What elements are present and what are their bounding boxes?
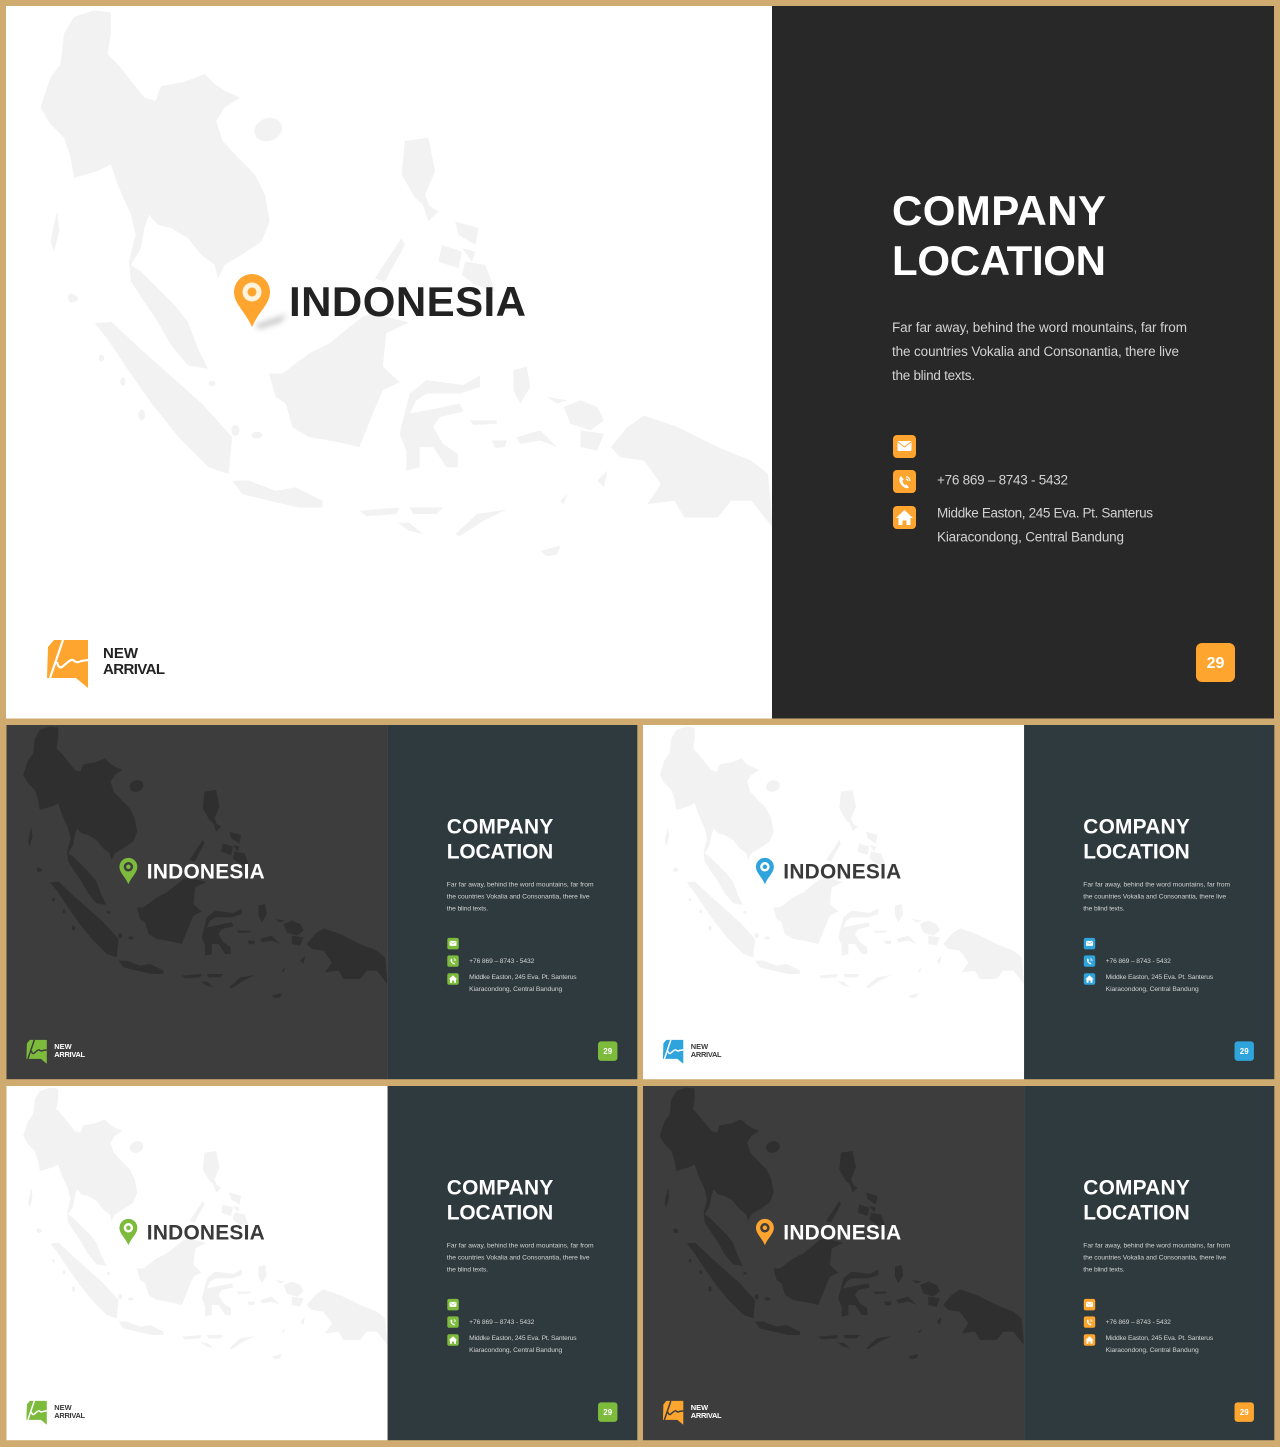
contact: phone number: +76 869 – 8743 - 5432	[937, 472, 1068, 488]
text block: description: the blind texts.	[1083, 906, 1125, 913]
page number badge: 29	[1240, 1047, 1249, 1056]
map: Southeast Asia	[660, 1088, 1024, 1359]
logo text	[691, 1403, 722, 1420]
logo text: ARRIVAL	[691, 1050, 722, 1059]
icon: email	[1084, 1299, 1095, 1310]
heading: company location	[1083, 815, 1190, 863]
slide: dark map with orange accent	[643, 1086, 1274, 1440]
panel: map side	[6, 6, 772, 718]
logo	[26, 1401, 47, 1425]
heading: company location: COMPANY	[892, 187, 1106, 234]
pin shadow	[255, 314, 287, 329]
text block: description: Far far away, behind the word mountains, far from	[892, 320, 1187, 335]
icon: phone	[447, 1316, 459, 1328]
logo	[47, 640, 88, 688]
map: Southeast Asia	[40, 10, 773, 556]
heading: INDONESIA: INDONESIA	[783, 861, 901, 884]
heading: company location: LOCATION	[1083, 840, 1190, 863]
text block: description: the countries Vokalia and Consonantia, there live	[1083, 894, 1226, 901]
heading: company location: LOCATION	[892, 237, 1106, 284]
heading: company location	[1083, 1176, 1190, 1224]
logo text: NEW	[691, 1403, 709, 1412]
logo text: NEW	[54, 1042, 73, 1051]
icon: home	[1084, 1334, 1095, 1346]
icon: phone	[893, 470, 916, 493]
text block: description: the countries Vokalia and Consonantia, there live	[447, 1255, 590, 1262]
page number badge: 29	[1207, 655, 1224, 672]
heading: company location: COMPANY	[1083, 1176, 1190, 1199]
icon: phone	[1084, 1316, 1095, 1328]
contact: address	[937, 506, 1153, 544]
icon: email	[447, 1299, 459, 1310]
panel: map side	[643, 725, 1024, 1079]
text block: description	[1083, 1243, 1230, 1274]
icon: home	[1084, 973, 1095, 985]
heading: INDONESIA: INDONESIA	[289, 278, 526, 325]
heading: INDONESIA: INDONESIA	[783, 1222, 901, 1245]
text block: description: the countries Vokalia and Consonantia, there live	[447, 894, 590, 901]
heading: company location	[447, 815, 553, 863]
logo	[663, 1040, 683, 1064]
map: Southeast Asia	[23, 1088, 387, 1359]
logo text: NEW	[54, 1403, 73, 1412]
icon: home	[447, 973, 459, 985]
heading: company location: COMPANY	[447, 815, 553, 838]
heading: INDONESIA: INDONESIA	[147, 1222, 265, 1245]
contact: address	[1106, 974, 1214, 993]
icon: home	[447, 1334, 459, 1346]
heading: company location	[892, 187, 1106, 284]
text block: description: the blind texts.	[1083, 1267, 1125, 1274]
logo	[26, 1040, 47, 1064]
logo	[663, 1401, 683, 1425]
heading: company location: COMPANY	[1083, 815, 1190, 838]
contact: address: Middke Easton, 245 Eva. Pt. Santerus	[1106, 1335, 1214, 1342]
contact: address: Middke Easton, 245 Eva. Pt. Santerus	[469, 974, 577, 981]
contact: phone number: +76 869 – 8743 - 5432	[469, 1319, 535, 1326]
icon: email	[447, 938, 459, 949]
text block: description: Far far away, behind the word mountains, far from	[1083, 1243, 1230, 1250]
page number badge	[1196, 643, 1235, 682]
slide: large white map with orange accent	[6, 6, 1274, 718]
icon: email	[1084, 938, 1095, 949]
map: Southeast Asia	[660, 727, 1024, 998]
logo text	[103, 645, 165, 678]
logo text	[691, 1042, 722, 1059]
page number badge	[1235, 1041, 1254, 1061]
contact: phone number: +76 869 – 8743 - 5432	[1106, 1319, 1171, 1326]
panel: company location	[1024, 725, 1274, 1079]
icon: phone	[447, 955, 459, 967]
contact: phone number: +76 869 – 8743 - 5432	[1106, 958, 1171, 965]
page number badge: 29	[603, 1408, 613, 1417]
slide: white map with green accent	[6, 1086, 637, 1440]
logo text: ARRIVAL	[103, 661, 165, 678]
icon: location pin	[119, 858, 137, 884]
panel: company location	[388, 725, 637, 1079]
text block: description	[447, 882, 594, 913]
text block: description: Far far away, behind the word mountains, far from	[447, 1243, 594, 1250]
panel: map side	[6, 1086, 388, 1440]
icon: location pin	[756, 858, 774, 884]
contact: address: Kiaracondong, Central Bandung	[937, 530, 1124, 544]
panel: company location	[388, 1086, 637, 1440]
heading: company location: COMPANY	[447, 1176, 553, 1199]
contact: phone number: +76 869 – 8743 - 5432	[469, 958, 535, 965]
contact: address	[469, 974, 577, 993]
slide: white map with blue accent	[643, 725, 1274, 1079]
text block: description	[447, 1243, 594, 1274]
text block: description: the blind texts.	[892, 368, 975, 383]
heading: company location: LOCATION	[447, 1201, 553, 1224]
page number badge	[1235, 1402, 1254, 1422]
contact: address: Middke Easton, 245 Eva. Pt. Santerus	[469, 1335, 577, 1342]
heading: company location: LOCATION	[447, 840, 553, 863]
contact: address: Kiaracondong, Central Bandung	[1106, 986, 1199, 993]
icon: email	[893, 435, 916, 458]
contact: address: Middke Easton, 245 Eva. Pt. Santerus	[1106, 974, 1214, 981]
heading: company location: LOCATION	[1083, 1201, 1190, 1224]
text block: description: Far far away, behind the word mountains, far from	[1083, 882, 1230, 889]
slide: dark map with green accent	[6, 725, 637, 1079]
panel: map side	[6, 725, 388, 1079]
page number badge	[598, 1041, 617, 1061]
text block: description	[1083, 882, 1230, 913]
icon: home	[893, 506, 916, 529]
panel: company location	[772, 6, 1274, 718]
contact: address: Kiaracondong, Central Bandung	[469, 986, 562, 993]
text block: description: Far far away, behind the word mountains, far from	[447, 882, 594, 889]
logo text: ARRIVAL	[691, 1411, 722, 1420]
icon: location pin	[119, 1219, 137, 1245]
icon: location pin	[234, 274, 270, 327]
map: Southeast Asia	[23, 727, 387, 998]
logo text	[54, 1403, 86, 1420]
contact: address: Kiaracondong, Central Bandung	[469, 1347, 562, 1354]
contact: address: Kiaracondong, Central Bandung	[1106, 1347, 1199, 1354]
panel: company location	[1024, 1086, 1274, 1440]
page number badge	[598, 1402, 617, 1422]
heading: company location	[447, 1176, 553, 1224]
heading: INDONESIA: INDONESIA	[147, 861, 265, 884]
page number badge: 29	[1240, 1408, 1249, 1417]
contact: address	[1106, 1335, 1214, 1354]
logo text: ARRIVAL	[54, 1050, 86, 1059]
logo text: NEW	[103, 645, 139, 662]
text block: description	[892, 320, 1187, 383]
logo text	[54, 1042, 86, 1059]
text block: description: the countries Vokalia and Consonantia, there live	[892, 344, 1179, 359]
logo text: NEW	[691, 1042, 709, 1051]
icon: location pin	[756, 1219, 774, 1245]
text block: description: the blind texts.	[447, 906, 488, 913]
panel: map side	[643, 1086, 1024, 1440]
text block: description: the blind texts.	[447, 1267, 488, 1274]
page number badge: 29	[603, 1047, 613, 1056]
logo text: ARRIVAL	[54, 1411, 86, 1420]
text block: description: the countries Vokalia and Consonantia, there live	[1083, 1255, 1226, 1262]
icon: phone	[1084, 955, 1095, 967]
contact: address: Middke Easton, 245 Eva. Pt. Santerus	[937, 506, 1153, 520]
contact: address	[469, 1335, 577, 1354]
